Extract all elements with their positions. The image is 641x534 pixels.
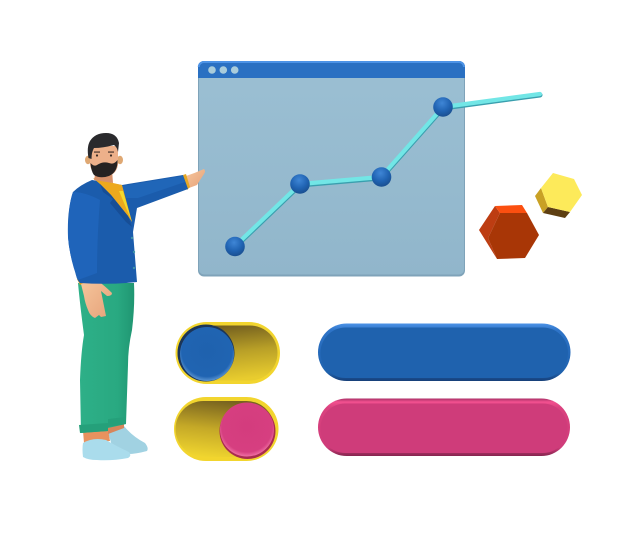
raised sleeve highlight [122,176,185,198]
left sleeve cuff [77,273,97,285]
bar: pink pill [318,398,570,456]
browser window panel [198,61,540,276]
data points [225,237,245,256]
jacket buttons [131,237,135,269]
trousers [78,283,134,433]
icon: yellow hexagon [535,173,582,218]
jacket arm highlight [68,192,100,280]
toggle: blue knob on yellow track [176,322,280,384]
raised hand [186,169,205,188]
ears [85,156,91,164]
neck [94,170,113,183]
beard [90,160,118,177]
face [90,146,118,177]
back shoe [108,426,148,454]
window body [198,61,465,276]
line chart [225,94,540,256]
ankles [83,429,110,443]
front shoe [82,439,130,460]
shirt [93,178,132,222]
icon: red hexagon [479,205,539,259]
bar: blue pill [318,324,570,381]
jacket [68,175,188,284]
right sleeve cuff [183,174,190,190]
window control dots [208,66,238,74]
eyes [94,152,114,157]
window title bar [198,61,465,78]
lower hand [81,279,112,318]
lapel edge [100,184,132,227]
hair [88,133,119,159]
trouser cuffs [79,417,126,433]
toggle: pink knob on yellow track [174,397,278,461]
person presenting [68,133,205,460]
